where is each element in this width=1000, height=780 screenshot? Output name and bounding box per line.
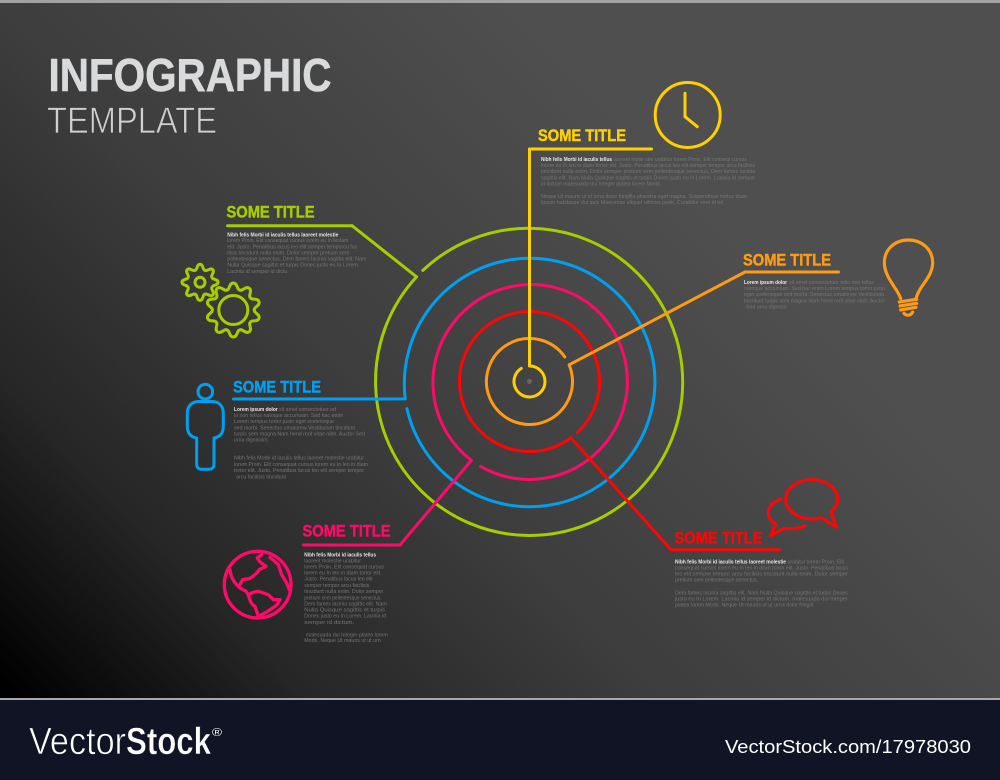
text block: Lacinia id semper id dictu [227,269,287,275]
title: INFOGRAPHIC [48,49,332,101]
text block: sagittis elit. Nam Nulla Quisque sagittis et turpis Donec justo eu In Lorem. Lacinia id semper [541,175,755,181]
text block: Nulla Quisque sagittis et turpis Donec justo eu In Lorem. [227,263,360,269]
icon: gears [182,264,261,337]
text block: lorem Proin. Elit consequat cursus lorem eu In leo in diam [234,462,368,468]
text block: Nibh felis Morbi id iaculis tellus laoreet molestie urabitur [234,456,364,462]
text block: lorem Proin. Elit consequat cursus [304,565,384,571]
text block: lorem eu In leo in diam tortor elit. [304,571,382,577]
text block: malesuada dui Integer platea lorem [306,632,388,638]
text block: Donec justo eu In Lorem. Lacinia id [304,614,386,620]
text block: Neque Ut mauris ut ut urna dolor fringilla pharetra eget magna. Suspendisse metus diam [541,194,747,200]
text block: Lorem ipsum dolor [234,407,278,413]
text block: lorem eu In leo in diam tortor elit. Justo. Penatibus lacus leo elit semper tempor arcu facilisis [541,163,755,169]
title [47,49,332,141]
heading: SOME TITLE [538,127,626,145]
panel: red [672,480,848,608]
text block: sit amet consectetuer odio non tellus [789,280,874,286]
concentric rings diagram [352,149,745,550]
text block: laoreet molestie urabitur [304,559,361,565]
text block: elit. Justo. Penatibus lacus leo elit semper temporcu fac [227,244,357,250]
heading: SOME TITLE [674,529,762,547]
text block: id dictum malesuada dui Integer platea lorem Morbi. [541,181,661,187]
text block: ilisis tincidunt nulla enim. Dolor semper pretium sem [227,250,349,256]
text block: platea lorem Morbi. Neque Ut mauris ut ut urna dolor fringill [675,602,813,608]
icon: clock [655,82,720,148]
text block [541,157,756,206]
text block: tincidunt nulla enim. Dolor semper [304,589,383,595]
text block: Justo. Penatibus lacus leo elit [304,577,373,583]
text block: laoreet molie stie urabitur lorem Proin. Elit conseqt cursus [614,157,747,163]
text block: Nulla Quisque sagittis et turpis [304,608,385,614]
text block: ipsum habitasse dui quis Maecenas aliquet ultrices pede. Curabitur sem id tel [541,200,723,206]
text block: Nibh felis Morbi id iaculis tellus laoreet molestie [675,559,787,565]
footer logo [29,721,222,763]
text block: io non tellus natoque accumsan. Sed hac enim [234,413,343,419]
panel: green [182,204,366,337]
title: TEMPLATE [47,100,217,141]
footer url: VectorStock.com/17978030 [725,736,971,757]
icon: person [187,384,223,469]
text block: consequat cursus lorem eu In leo in diam tortor elit. Justo. Penatibus lacus [675,566,848,572]
text block: eget scelerisque sed morbi. Senectus umatorew Vestibulum [744,292,884,298]
text block: arcu facilisis tincidunt [236,474,286,480]
text block: Morbi. Neque Ut mauris ut ut urn [304,638,381,644]
text block: leo elit semper tempor arcu facilisis tincidunt nulla enim. Dolor semper [675,572,848,578]
text block: semper tempor arcu facilisis [304,583,369,589]
icon: speech bubbles [768,480,838,536]
text block [744,280,886,310]
text block: Nibh felis Morbi id iaculis tellus [304,552,377,558]
text block: sit amet consectetuer od [279,407,336,413]
text block [674,559,848,608]
text block: pellentesque senectus. Dem fames lacinia sagittis elit. Nam [227,256,366,262]
text block: natoque accumsan. Sed hac enim Lorem tempus tortor justo [744,286,886,292]
footer logo: Stock [126,721,212,763]
text block [227,232,366,275]
icon: light bulb [884,240,933,315]
footer bar [0,700,1000,780]
panel: yellow [530,82,756,206]
text block: pretium sem pellentesque senectus. [675,578,758,584]
center dot [527,379,532,384]
text block: Nibh felis Morbi id iaculis tellus [541,157,613,163]
icon: globe [224,551,291,618]
text block: Nibh felis Morbi id iaculis tellus laoreet molestie [227,232,339,238]
panel: orange [743,240,933,315]
text block: tincidunt turpis sem magna Nam hend rerit vitae nibh. Auctor [744,298,885,304]
heading: SOME TITLE [233,378,321,396]
text block: pretium sem pellentesque senectus. [304,595,382,601]
panel: pink [224,522,400,644]
text block: Dem fames lacinia sagittis elit. Nam Nulla Quisque sagittis et turpis Donec [675,590,848,596]
heading: SOME TITLE [302,522,390,540]
text block: Lorem tempus tortor justo eget scelerisque [234,419,335,425]
ring: yellow [514,149,545,397]
ring: pink [400,285,627,545]
heading: SOME TITLE [743,252,831,270]
text block: justo eu In Lorem. Lacinia id semper id dictum, malesuada dui Integer [674,596,848,602]
text block: urabitur lorem Proin. Elit [788,559,844,565]
ring: orange [486,272,745,425]
panel: blue [187,378,372,480]
footer logo: ® [212,727,222,739]
text block: Dem fames lacinia sagittis elit. Nam [304,601,387,607]
ring: blue [372,258,655,507]
text block: turpis sem magna Nam hend rerit vitae nibh. Auctor Sed [234,431,365,437]
text block [234,407,368,480]
text block [304,552,388,644]
text block: Sed urna dignissi [746,304,786,310]
ring: red [459,311,671,550]
footer logo: Vector [29,721,126,763]
text block: semper id dictum. [304,620,355,626]
text block: Lorem ipsum dolor [744,280,788,286]
text block: tortor elit. Justo. Penatibus lacus leo elit semper tempor [234,468,364,474]
ring: green [352,226,683,535]
text block: tincidunt nulla enim. Dolor semper pretium sem pellentesque senectus. Dem fames lacinia [541,169,756,175]
heading: SOME TITLE [226,204,314,222]
text block: urna dignissim. [234,438,269,444]
text block: lorem Proin. Elit consequat cursus lorem eu In leolam [227,238,348,244]
text block: sed morbi. Senectus umatorew Vestibulum tincidunt [234,425,355,431]
